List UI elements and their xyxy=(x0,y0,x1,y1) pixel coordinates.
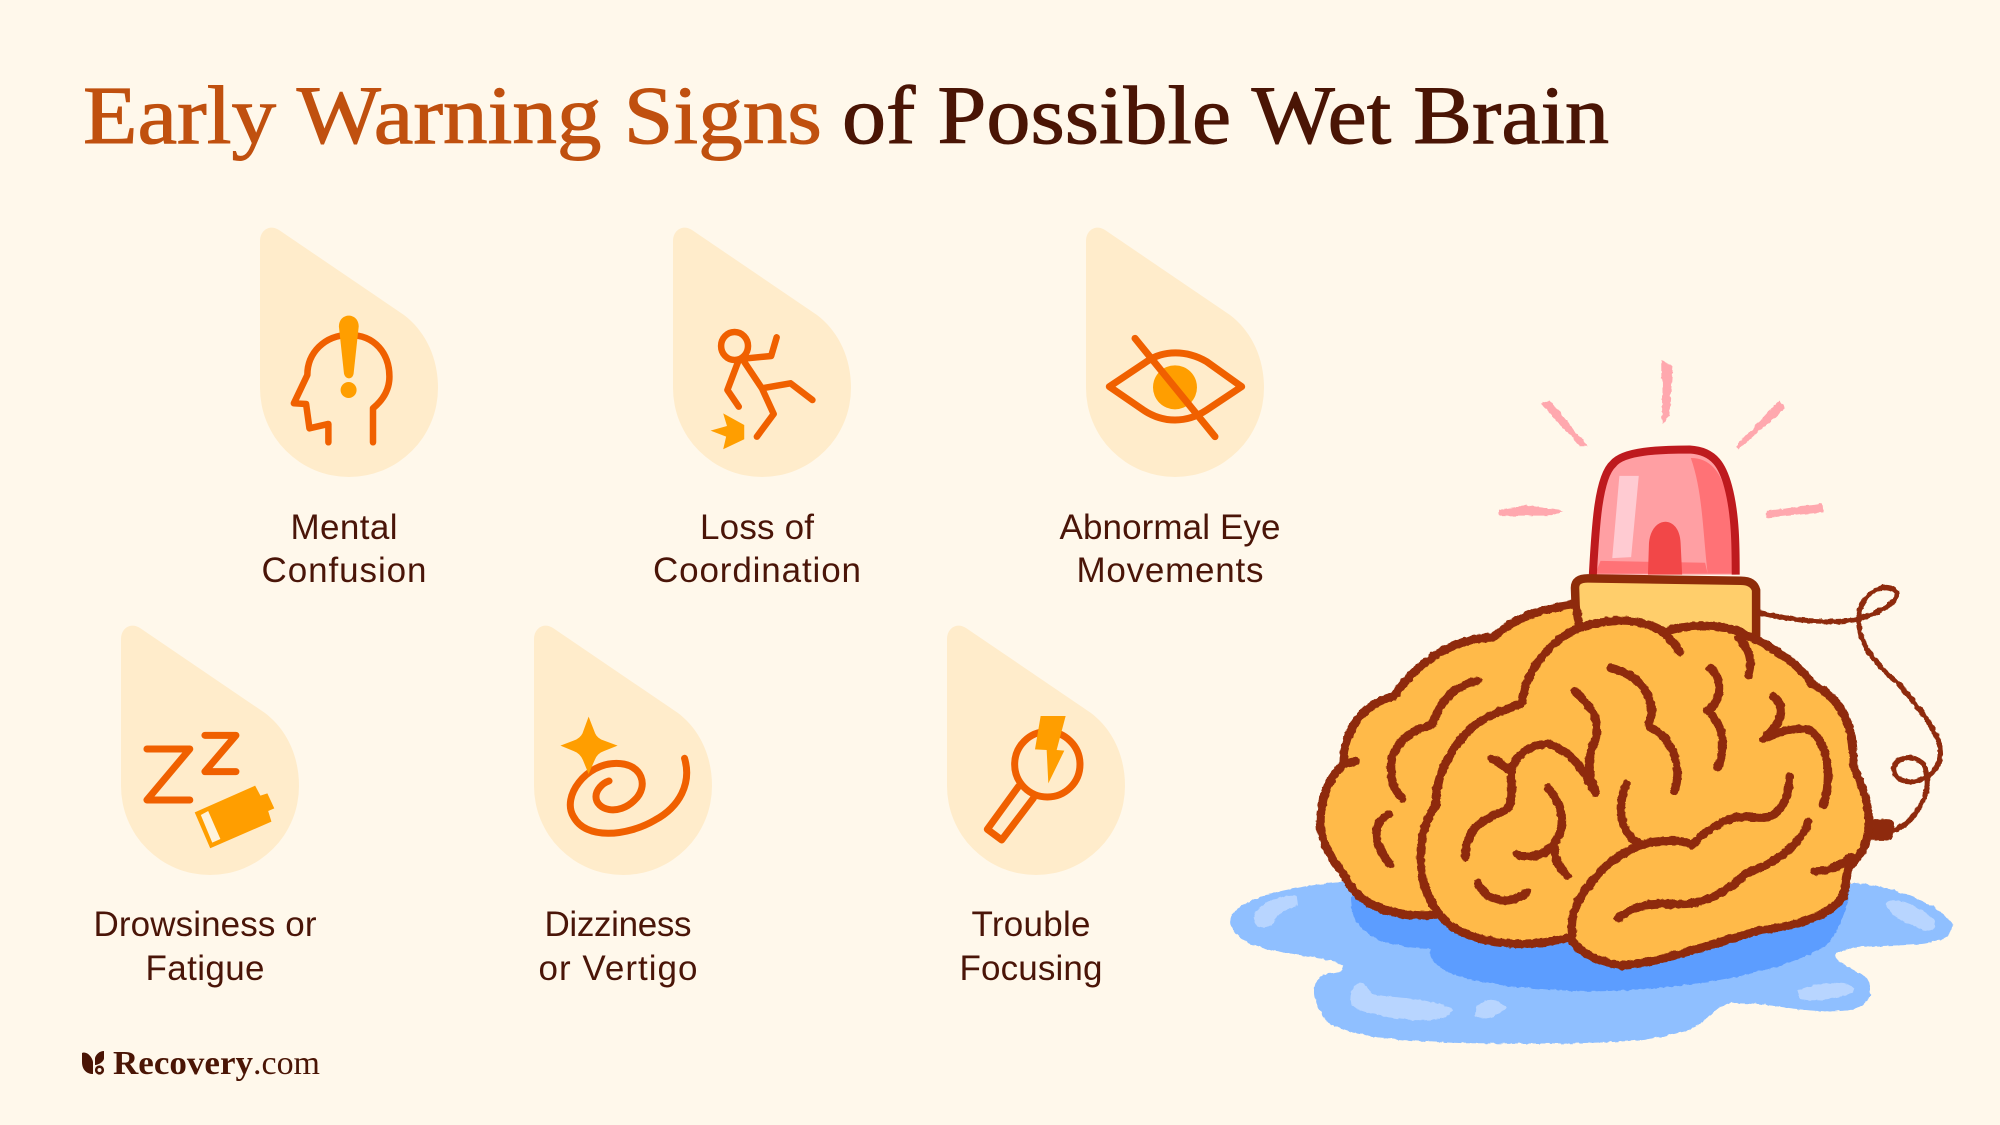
teardrop background xyxy=(260,228,438,477)
label xyxy=(1060,508,1280,590)
label: Coordination xyxy=(653,551,861,590)
siren dome xyxy=(1593,450,1736,575)
title xyxy=(83,69,1609,161)
label xyxy=(960,905,1102,988)
label xyxy=(653,508,861,590)
panel: trouble focusing xyxy=(947,626,1125,988)
power cord and plug xyxy=(1759,587,1941,840)
siren light rays xyxy=(1498,360,1823,518)
icon: falling figure xyxy=(711,332,812,449)
label: Movements xyxy=(1076,551,1264,590)
teardrop background xyxy=(534,626,712,875)
logo xyxy=(82,1045,320,1082)
teardrop background xyxy=(947,626,1125,875)
panel: dizziness or vertigo xyxy=(534,626,712,988)
icon: head with exclamation mark xyxy=(294,316,389,442)
title: Early Warning Signs xyxy=(83,69,822,161)
icon: spiral with sparkle xyxy=(560,717,687,833)
icon: magnifier with lightning bolt xyxy=(987,716,1080,840)
label: Focusing xyxy=(960,949,1102,988)
teardrop background xyxy=(673,228,851,477)
wordmark: Recovery xyxy=(113,1045,253,1082)
icon: sleep letters and low battery xyxy=(147,735,274,848)
panel: abnormal eye movements xyxy=(1060,228,1280,590)
panel: loss of coordination xyxy=(653,228,861,590)
label: or Vertigo xyxy=(538,949,698,988)
label: Abnormal Eye xyxy=(1060,508,1280,547)
label xyxy=(94,905,317,988)
puddle xyxy=(1230,859,1953,1043)
label xyxy=(262,508,426,590)
label: Confusion xyxy=(262,551,426,590)
label xyxy=(538,905,698,988)
label: Trouble xyxy=(972,905,1090,944)
teardrop background xyxy=(121,626,299,875)
label: Fatigue xyxy=(146,949,264,988)
wordmark: .com xyxy=(253,1045,320,1082)
siren base collar xyxy=(1575,578,1756,637)
label: Dizziness xyxy=(544,905,692,944)
label: Mental xyxy=(290,508,398,547)
label: Drowsiness or xyxy=(94,905,317,944)
panel: drowsiness or fatigue xyxy=(94,626,317,988)
label: Loss of xyxy=(700,508,814,547)
brain xyxy=(1321,604,1869,965)
icon: crossed eye xyxy=(1109,338,1242,437)
title: of Possible Wet Brain xyxy=(842,69,1609,161)
panel: mental confusion xyxy=(260,228,438,590)
logo mark xyxy=(82,1051,104,1074)
illustration: brain with siren in a puddle xyxy=(1230,360,1953,1043)
teardrop background xyxy=(1086,228,1264,477)
